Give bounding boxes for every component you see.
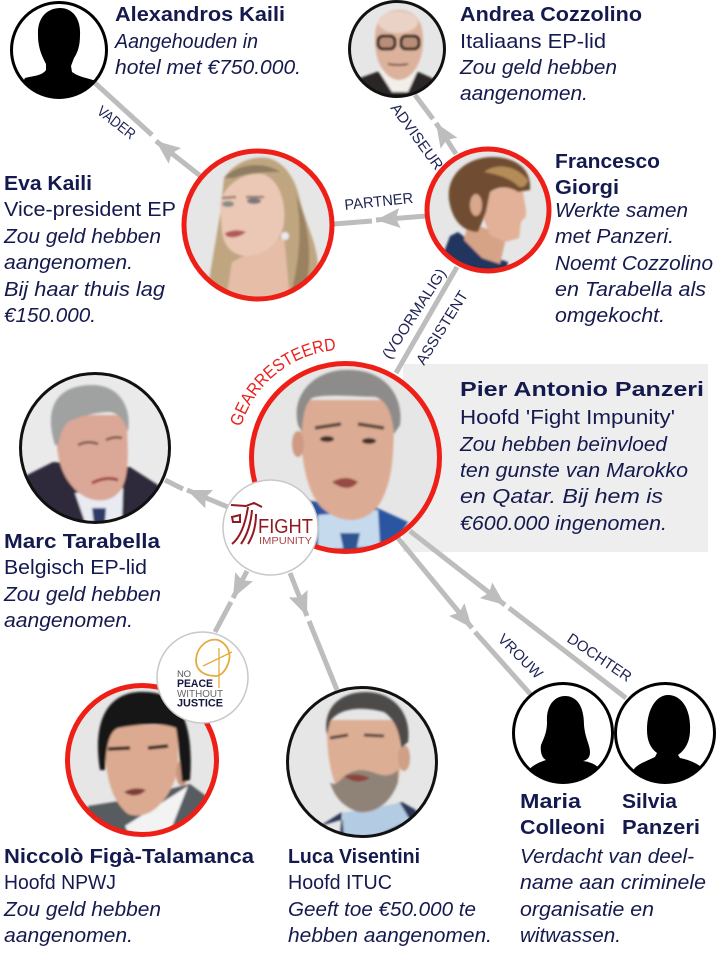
text: Pier Antonio Panzeri: Zou hebben beïnvloed bbox=[459, 434, 668, 456]
text: Eva Kaili: Zou geld hebben bbox=[3, 226, 161, 248]
text: Niccolò Figà-Talamanca: Zou geld hebben bbox=[3, 899, 161, 921]
text: Francesco Giorgi: met Panzeri. bbox=[555, 226, 674, 248]
text: Luca Visentini bbox=[288, 845, 492, 947]
arrow: Panzeri to Maria Colleoni bbox=[397, 537, 532, 696]
text: Pier Antonio Panzeri: Pier Antonio Panzeri bbox=[460, 378, 704, 401]
text: Andrea Cozzolino: Zou geld hebben bbox=[459, 57, 617, 79]
text: Pier Antonio Panzeri: €600.000 ingenomen. bbox=[460, 513, 667, 535]
text: Francesco Giorgi bbox=[555, 150, 713, 327]
logo: Fight Impunity: FIGHT bbox=[258, 516, 313, 538]
text: Maria and Silvia description: name aan criminele bbox=[520, 872, 706, 894]
text: Marc Tarabella: Belgisch EP-lid bbox=[4, 557, 147, 579]
text: Andrea Cozzolino: aangenomen. bbox=[460, 83, 588, 105]
arrow: Fight Impunity to NPWJ bbox=[215, 571, 247, 632]
line: Panzeri to Francesco Giorgi bbox=[396, 267, 457, 373]
text: Eva Kaili bbox=[3, 172, 176, 327]
text: Francesco Giorgi: Werkte samen bbox=[555, 200, 688, 222]
portrait: Maria Colleoni silhouette bbox=[512, 682, 614, 784]
text: Luca Visentini: Geeft toe €50.000 te bbox=[288, 899, 476, 921]
text: Niccolò Figà-Talamanca: Niccolò Figà-Talamanca bbox=[4, 845, 255, 868]
arrow: Fight Impunity to Visentini bbox=[290, 573, 337, 690]
text: Eva Kaili: aangenomen. bbox=[4, 252, 133, 274]
text: Pier Antonio Panzeri: Hoofd 'Fight Impunity' bbox=[460, 407, 675, 429]
portrait: Niccolò Figà-Talamanca bbox=[68, 686, 216, 840]
text: Andrea Cozzolino: Italiaans EP-lid bbox=[460, 31, 606, 53]
arrow: Panzeri to Silvia Panzeri bbox=[410, 531, 626, 698]
portrait: Luca Visentini bbox=[288, 688, 436, 836]
logo: Fight Impunity bbox=[223, 480, 318, 575]
text: Maria Colleoni name bbox=[520, 790, 605, 839]
portrait: Pier Antonio Panzeri bbox=[252, 364, 440, 552]
portrait: Marc Tarabella bbox=[18, 374, 172, 530]
logo: No Peace Without Justice bbox=[157, 632, 248, 723]
portrait: Silvia Panzeri silhouette bbox=[614, 682, 716, 784]
text: Francesco Giorgi: en Tarabella als bbox=[555, 279, 706, 301]
portrait: Francesco Giorgi bbox=[427, 149, 549, 274]
text: Niccolò Figà-Talamanca: aangenomen. bbox=[4, 925, 133, 947]
label: ASSISTENT: ASSISTENT bbox=[413, 288, 472, 368]
arrow: Francesco Giorgi to Eva Kaili bbox=[334, 216, 426, 224]
text: Maria and Silvia description: organisatie en bbox=[520, 899, 654, 921]
text: Silvia Panzeri name bbox=[622, 790, 700, 839]
portrait: Alexandros Kaili silhouette bbox=[10, 2, 110, 105]
text: Francesco Giorgi: Francesco bbox=[555, 150, 660, 173]
text: Marc Tarabella: Marc Tarabella bbox=[4, 530, 161, 553]
text: Luca Visentini: hebben aangenomen. bbox=[288, 925, 492, 947]
text: Marc Tarabella bbox=[3, 530, 161, 632]
text: Niccolò Figà-Talamanca bbox=[3, 845, 255, 947]
text: Alexandros Kaili: Aangehouden in bbox=[114, 31, 258, 53]
text: Maria Colleoni name: Maria bbox=[520, 790, 582, 813]
text: Andrea Cozzolino: Andrea Cozzolino bbox=[460, 3, 642, 26]
portrait: Andrea Cozzolino bbox=[350, 2, 446, 102]
text: Luca Visentini: Luca Visentini bbox=[288, 845, 420, 868]
logo: No Peace Without Justice: WITHOUT bbox=[177, 689, 223, 700]
text: Eva Kaili: €150.000. bbox=[4, 305, 96, 327]
text: Luca Visentini: Hoofd ITUC bbox=[288, 872, 392, 894]
panel: Panzeri background bbox=[403, 364, 708, 552]
label: ADVISEUR: ADVISEUR bbox=[387, 100, 446, 174]
text: Andrea Cozzolino bbox=[459, 3, 642, 105]
text: Pier Antonio Panzeri: ten gunste van Marokko bbox=[460, 460, 688, 482]
text: Marc Tarabella: aangenomen. bbox=[4, 610, 133, 632]
label: VROUW: VROUW bbox=[494, 631, 546, 683]
text: Niccolò Figà-Talamanca: Hoofd NPWJ bbox=[4, 872, 116, 894]
logo: Fight Impunity: IMPUNITY bbox=[259, 535, 312, 547]
label: PARTNER: PARTNER bbox=[344, 190, 414, 214]
label: GEARRESTEERD: GEARRESTEERD bbox=[230, 338, 335, 425]
text: Eva Kaili: Eva Kaili bbox=[4, 172, 92, 195]
text: Maria Colleoni name: Colleoni bbox=[520, 816, 605, 839]
text: Pier Antonio Panzeri: en Qatar. Bij hem is bbox=[460, 486, 663, 508]
text: Alexandros Kaili: hotel met €750.000. bbox=[115, 57, 301, 79]
arrow: Eva Kaili to Alexandros Kaili bbox=[95, 83, 203, 178]
text: Maria and Silvia description: Verdacht van deel- bbox=[520, 846, 694, 868]
text: Francesco Giorgi: Noemt Cozzolino bbox=[555, 253, 713, 275]
text: Silvia Panzeri name: Panzeri bbox=[622, 816, 700, 839]
arrow: Francesco Giorgi to Andrea Cozzolino bbox=[415, 95, 456, 154]
label: DOCHTER: DOCHTER bbox=[564, 630, 635, 686]
label: VADER: VADER bbox=[94, 103, 139, 143]
text: Francesco Giorgi: Giorgi bbox=[555, 176, 619, 199]
arrow: Fight Impunity to Tarabella bbox=[165, 480, 228, 507]
text: Maria and Silvia description bbox=[520, 846, 706, 947]
text: Silvia Panzeri name: Silvia bbox=[622, 790, 678, 813]
text: Marc Tarabella: Zou geld hebben bbox=[3, 584, 161, 606]
text: Francesco Giorgi: omgekocht. bbox=[555, 305, 665, 327]
portrait: Eva Kaili bbox=[184, 151, 332, 305]
logo: No Peace Without Justice: PEACE bbox=[177, 678, 213, 690]
text: Maria and Silvia description: witwassen. bbox=[520, 925, 621, 947]
label: (VOORMALIG): (VOORMALIG) bbox=[379, 266, 450, 362]
logo: No Peace Without Justice: JUSTICE bbox=[177, 698, 223, 710]
text: Eva Kaili: Bij haar thuis lag bbox=[4, 279, 165, 301]
text: Alexandros Kaili: Alexandros Kaili bbox=[115, 3, 285, 26]
logo: No Peace Without Justice: NO bbox=[177, 669, 191, 680]
text: Pier Antonio Panzeri bbox=[459, 378, 704, 535]
text: Eva Kaili: Vice-president EP bbox=[4, 199, 176, 221]
text: Alexandros Kaili bbox=[114, 3, 301, 79]
